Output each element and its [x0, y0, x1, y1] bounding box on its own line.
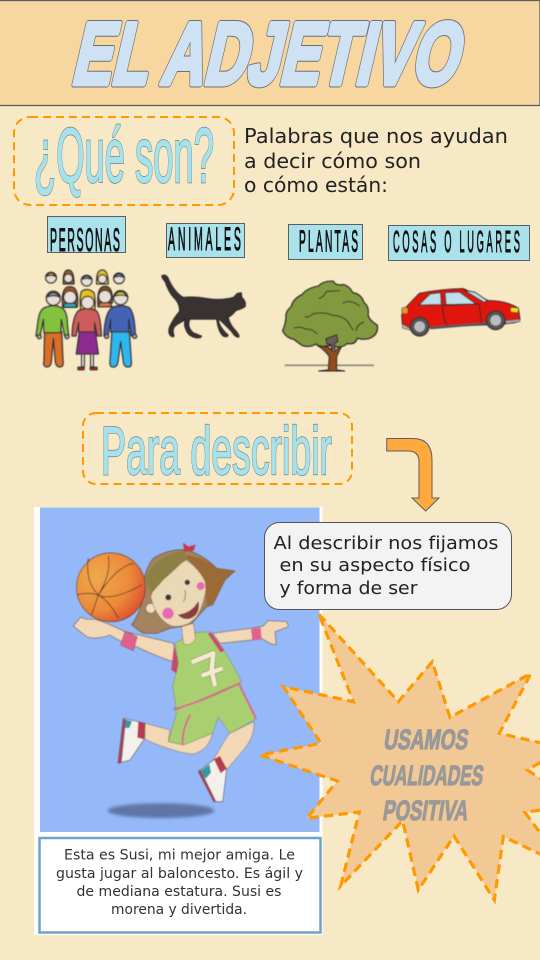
label: plantas: PLANTAS: [299, 223, 358, 258]
intro text: a decir cómo son: [244, 149, 421, 173]
photo panel: [34, 507, 322, 935]
heading box: Qué son: ¿Qué son?: [34, 113, 214, 199]
icon: tree: [283, 281, 377, 371]
caption box: Esta es Susi, mi mejor amiga. Le: [64, 848, 295, 864]
starburst callout: [260, 614, 540, 900]
arrow: [387, 438, 439, 511]
starburst callout: USAMOS: [382, 723, 471, 755]
icon: car: [402, 289, 520, 336]
caption box: morena y divertida.: [111, 902, 247, 918]
intro text: Palabras que nos ayudan: [244, 124, 508, 148]
illustration: girl with ball: [73, 543, 288, 818]
header banner: [0, 0, 540, 106]
callout: al describir: y forma de ser: [280, 578, 418, 599]
intro text: o cómo están:: [244, 173, 388, 197]
label: personas: PERSONAS: [50, 223, 120, 259]
heading box: Para describir: Para describir: [101, 413, 332, 489]
starburst callout: POSITIVA: [381, 794, 471, 826]
caption box: de mediana estatura. Susi es: [76, 884, 282, 900]
label: cosas o lugares: COSAS O LUGARES: [393, 224, 520, 259]
caption box: gusta jugar al baloncesto. Es ágil y: [56, 866, 303, 882]
heading box: Para describir: Para describir: [101, 413, 332, 489]
intro text: [244, 124, 508, 197]
callout: al describir: en su aspecto físico: [280, 555, 470, 576]
callout: al describir: [264, 522, 512, 610]
icon: people: [36, 270, 137, 370]
callout: al describir: Al describir nos fijamos: [274, 533, 498, 554]
label: animales: ANIMALES: [168, 222, 241, 258]
icon: cat: [162, 275, 246, 338]
heading box: Qué son: [14, 113, 234, 205]
heading box: Para describir: [83, 413, 352, 489]
caption box: [40, 838, 320, 932]
heading box: Qué son: ¿Qué son?: [34, 113, 214, 199]
